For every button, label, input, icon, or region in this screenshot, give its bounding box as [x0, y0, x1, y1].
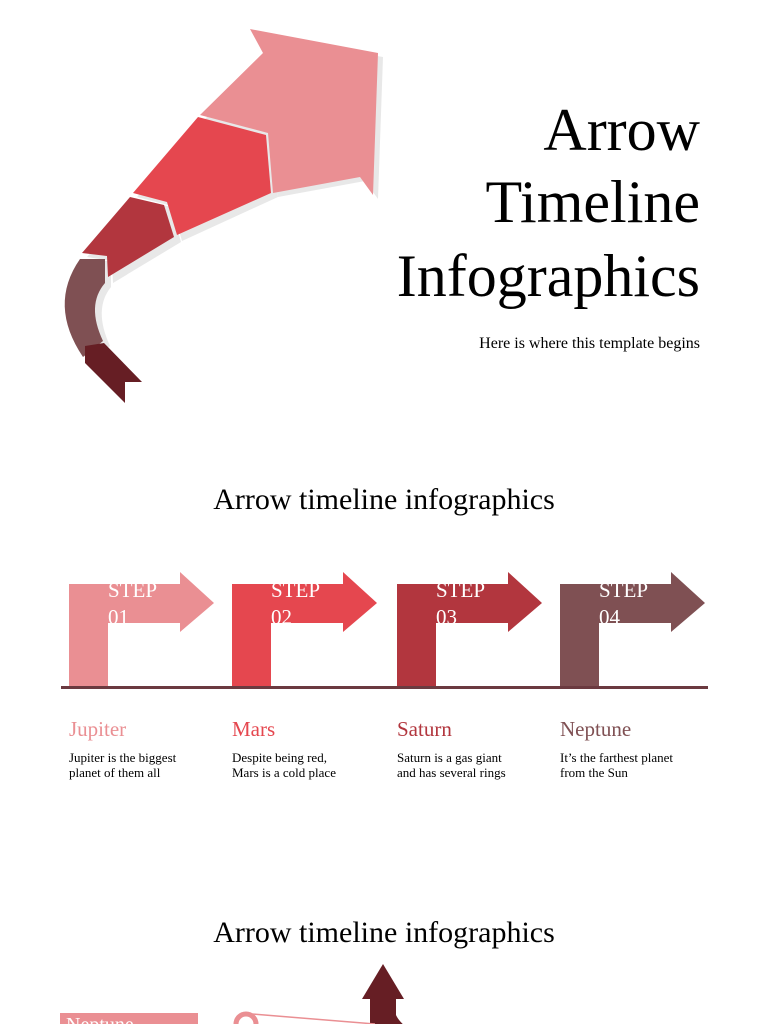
label: Neptune: It’s the farthest planet [560, 750, 673, 765]
step 2: 02 [271, 605, 292, 629]
title: Timeline [486, 169, 700, 235]
step 1: STEP [108, 578, 157, 602]
step labels [69, 717, 673, 780]
title: Infographics [397, 243, 700, 309]
bottom partial diagram [60, 964, 410, 1024]
Neptune box [60, 1013, 198, 1024]
label: Neptune: from the Sun [560, 765, 628, 780]
label: Neptune: Neptune [560, 717, 631, 741]
arrow segment: red [133, 117, 271, 235]
label: Saturn: Saturn is a gas giant [397, 750, 502, 765]
label: Jupiter: planet of them all [69, 765, 161, 780]
arrow segment: dark red [82, 197, 174, 277]
section heading 1: Arrow timeline infographics [213, 483, 555, 516]
step 1: 01 [108, 605, 129, 629]
step 4: STEP [599, 578, 648, 602]
label: Mars: Mars is a cold place [232, 765, 336, 780]
step 2: STEP [271, 578, 320, 602]
arrow segment: head [200, 29, 378, 195]
circle marker [236, 1014, 256, 1024]
step 3: 03 [436, 605, 457, 629]
label: Jupiter: Jupiter is the biggest [69, 750, 177, 765]
label: Mars [232, 717, 336, 780]
label: Mars: Despite being red, [232, 750, 327, 765]
step 4 [560, 572, 705, 687]
subtitle: Here is where this template begins [479, 335, 700, 352]
hero arrow [65, 29, 383, 403]
label: Jupiter: Jupiter [69, 717, 126, 741]
arrow segment: tail ribbon [85, 343, 142, 403]
step 3 [397, 572, 542, 687]
label: Saturn: and has several rings [397, 765, 506, 780]
step 4: 04 [599, 605, 620, 629]
label: Mars: Mars [232, 717, 275, 741]
label: Saturn [397, 717, 506, 780]
label: Neptune [560, 717, 673, 780]
step arrows [69, 572, 705, 687]
title [397, 97, 701, 309]
step 1 [69, 572, 214, 687]
step 2 [232, 572, 377, 687]
vertical arrow [362, 964, 410, 1024]
step 3: STEP [436, 578, 485, 602]
arrow segment: mauve curve [65, 259, 105, 357]
label: Saturn: Saturn [397, 717, 452, 741]
label: Jupiter [69, 717, 177, 780]
section heading 2: Arrow timeline infographics [213, 916, 555, 949]
title: Arrow [543, 97, 701, 163]
